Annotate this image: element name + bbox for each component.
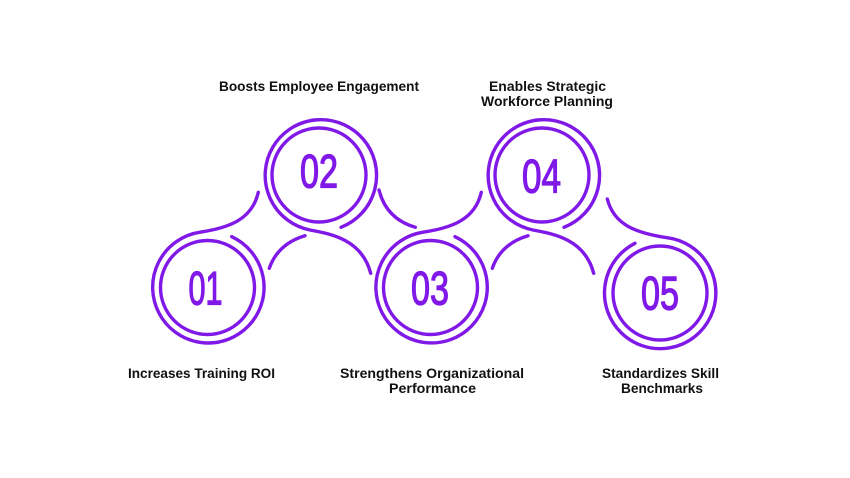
ring: step 4 inner [495, 128, 589, 222]
label: step 5: Standardizes Skill [602, 366, 719, 381]
arc: link below step 4 [492, 236, 528, 268]
label: step 5 [602, 366, 719, 396]
label: step 3 [340, 366, 524, 396]
label: step 5: Benchmarks [621, 381, 703, 396]
label: step 1: Increases Training ROI [128, 366, 275, 381]
step 4: circle and connector [488, 120, 600, 273]
ring: step 5 inner [613, 246, 707, 340]
ring: step 1 inner [160, 240, 254, 334]
step 1: circle and connector [153, 192, 264, 343]
step 2: circle and connector [265, 120, 415, 273]
ring: step 1 outer [153, 192, 264, 343]
step 3: circle and connector [376, 192, 487, 343]
number 04: 04 [522, 150, 561, 202]
label: step 4 [481, 79, 613, 109]
number 02: 02 [300, 144, 338, 198]
ring: step 2 outer [265, 120, 377, 273]
ring: step 4 outer [488, 120, 600, 273]
number 01: 01 [188, 262, 222, 314]
ring: step 3 inner [384, 240, 478, 334]
number 03: 03 [411, 262, 449, 314]
label: step 2: Boosts Employee Engagement [219, 79, 420, 94]
label: step 4: Enables Strategic [489, 79, 607, 94]
label: step 3: Performance [389, 381, 477, 396]
number 05: 05 [641, 266, 679, 320]
arc: link right of step 2 [379, 190, 415, 227]
label: step 3: Strengthens Organizational [340, 366, 524, 381]
label: step 4: Workforce Planning [481, 94, 613, 109]
ring: step 5 outer [604, 199, 716, 349]
ring: step 3 outer [376, 192, 487, 343]
arc: link below step 2 [269, 236, 305, 268]
ring: step 2 inner [272, 128, 366, 222]
step 5: circle and connector [604, 199, 716, 349]
